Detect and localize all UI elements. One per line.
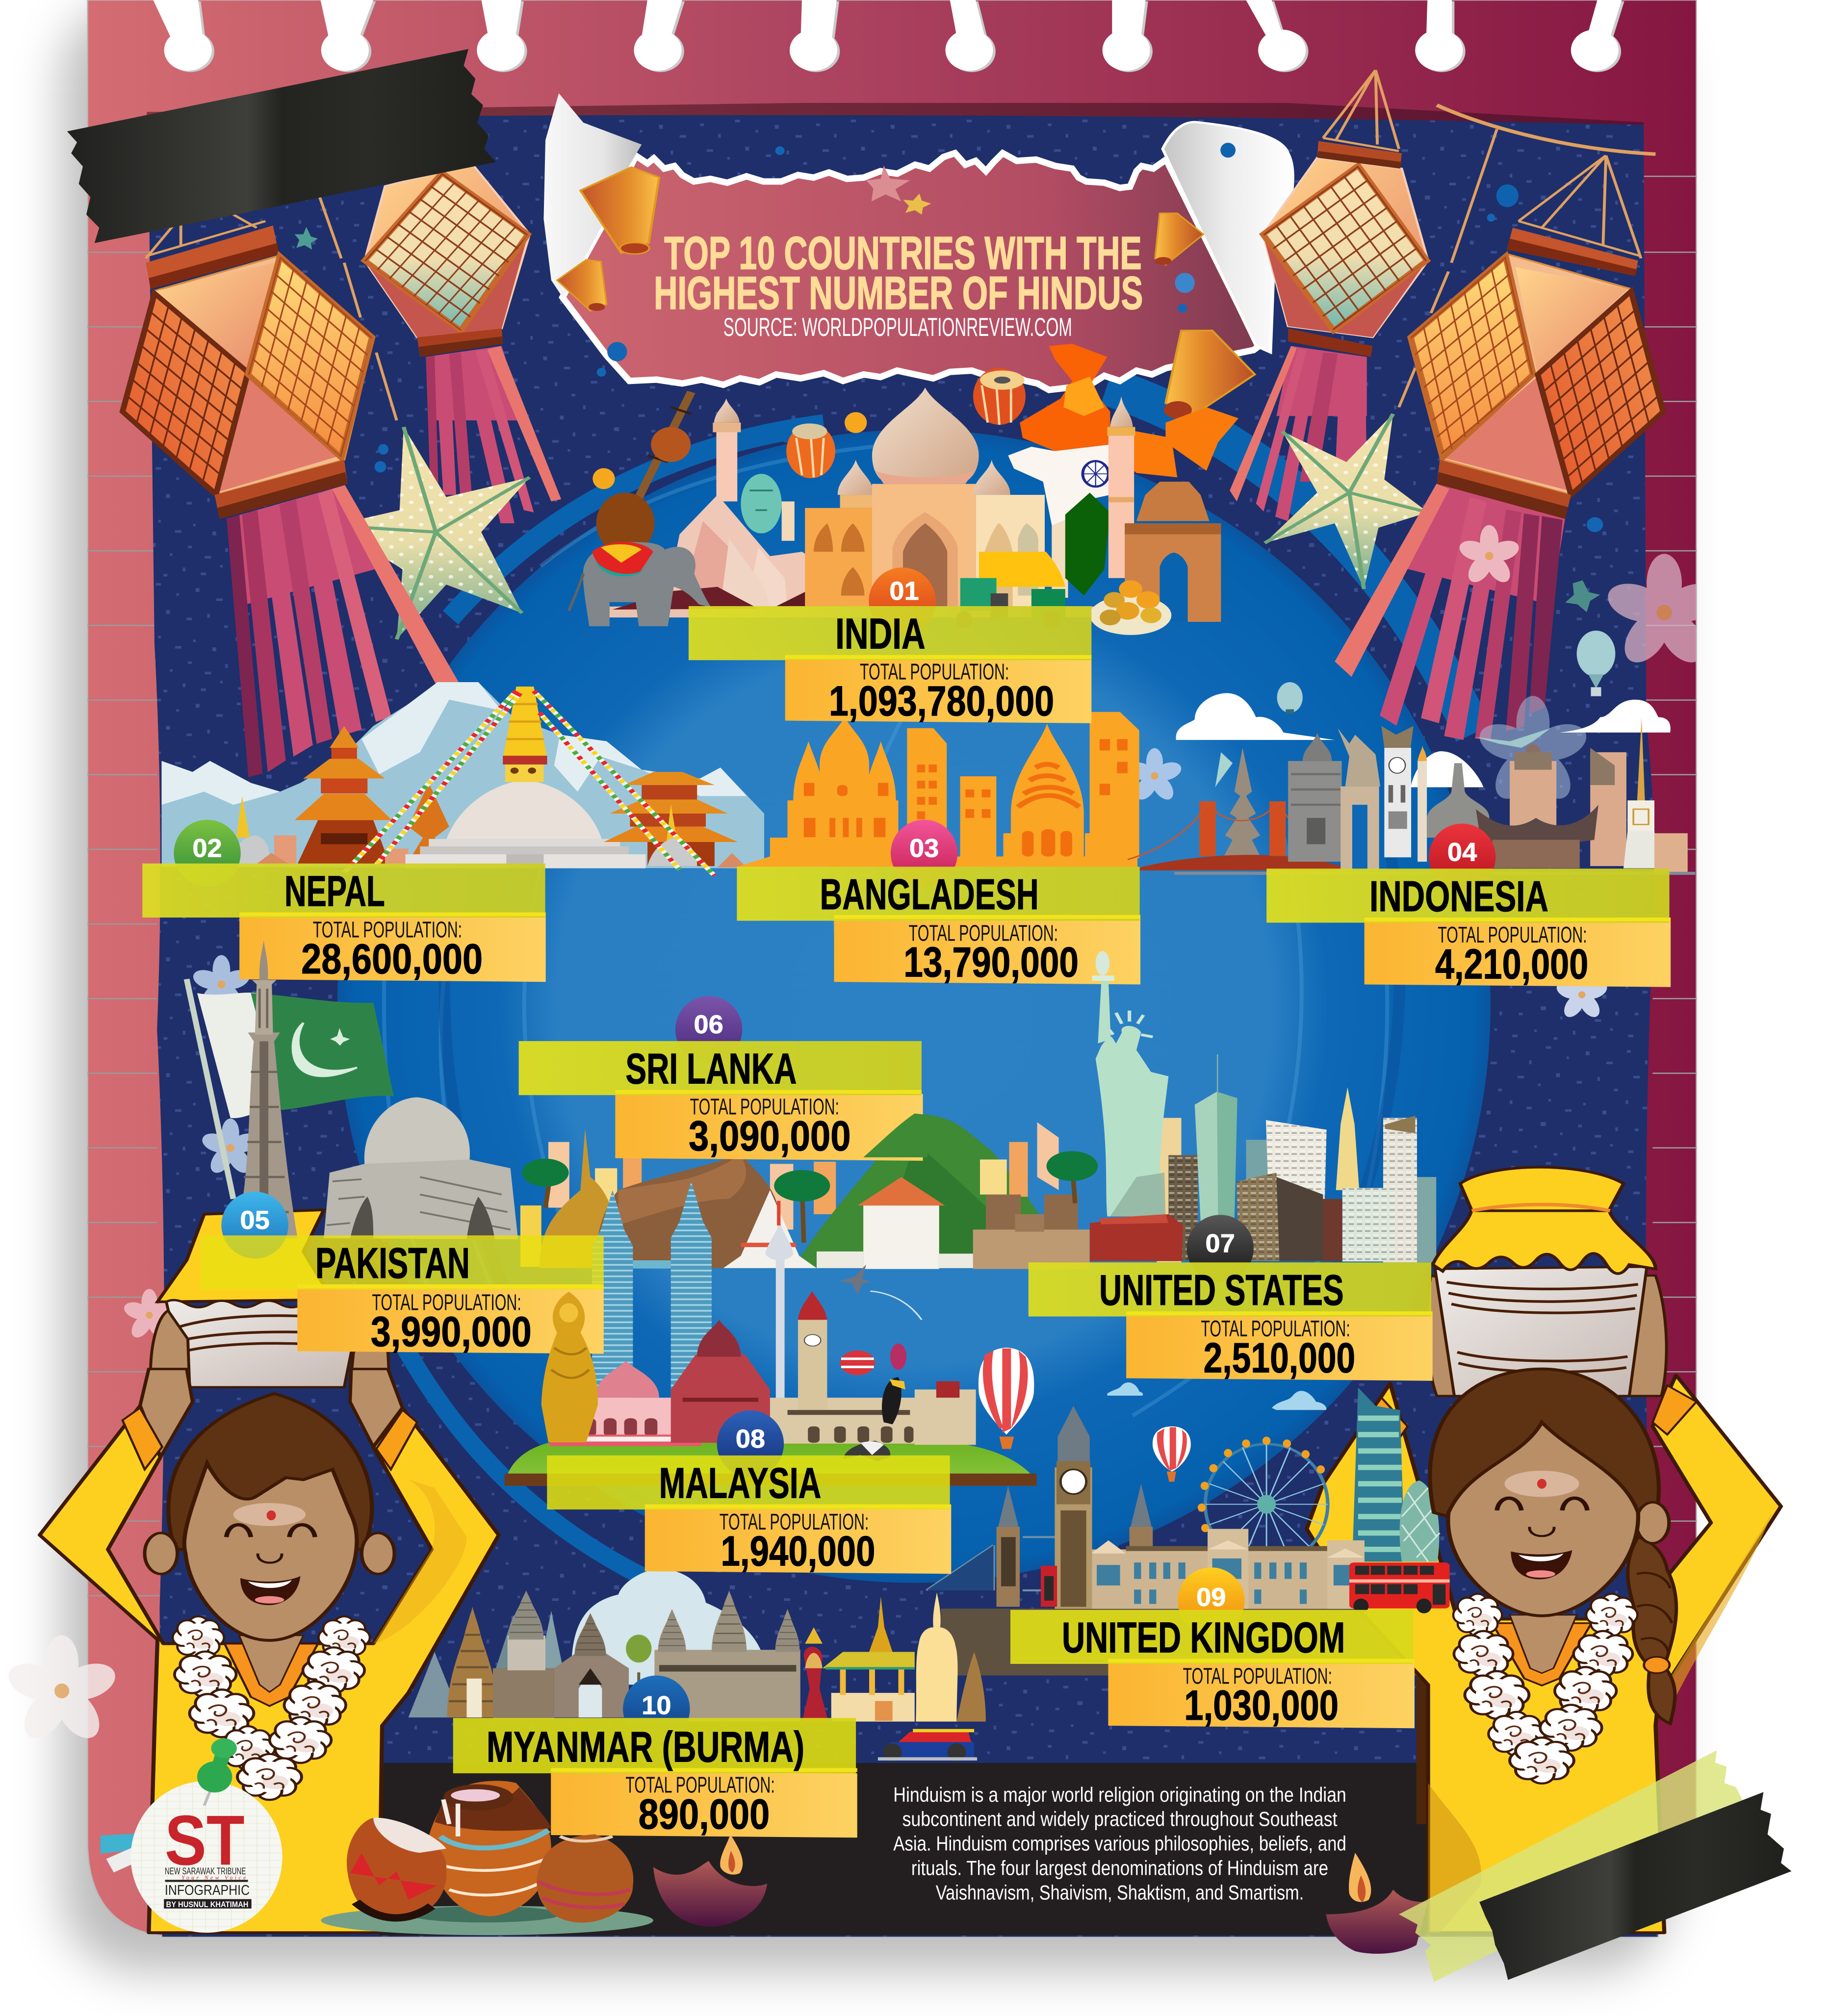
title sky lanterns right — [1155, 213, 1255, 419]
country label 06 Sri Lanka: 06 — [694, 1010, 723, 1039]
country label 08 Malaysia: 08 — [736, 1425, 765, 1454]
Hinduism description text: Hinduism is a major world religion originating on the Indian — [893, 1783, 1346, 1806]
left small lantern tassels and star — [320, 197, 561, 639]
Hinduism description text: subcontinent and widely practiced throughout Southeast — [902, 1808, 1338, 1831]
country label 09 United Kingdom: UNITED KINGDOM — [1062, 1613, 1345, 1661]
scene: Malaysia landmarks — [505, 1182, 1036, 1486]
title sky lanterns left — [557, 167, 659, 311]
golden statue over Pakistan label — [541, 1292, 598, 1442]
dark page edge strip — [147, 103, 1644, 142]
gold star and right dots — [903, 184, 1603, 612]
girl: head, braid and garland — [1430, 1369, 1676, 1784]
scene: hot air balloons and clouds — [979, 1348, 1326, 1482]
scene: Nepal landmarks — [161, 682, 764, 876]
right big lantern tassels — [1335, 484, 1565, 740]
binder holes — [153, 0, 1624, 72]
country label 02 Nepal — [142, 820, 546, 983]
scene: UK landmarks — [927, 1387, 1450, 1613]
country label 04 Indonesia: 04 — [1447, 838, 1477, 867]
diya lamp left — [653, 1835, 767, 1927]
Hinduism description text: rituals. The four largest denominations of Hinduism are — [911, 1856, 1328, 1879]
country label 09 United Kingdom — [1010, 1567, 1415, 1729]
country label 08 Malaysia: 1,940,000 — [721, 1528, 875, 1575]
country label 04 Indonesia — [1266, 823, 1671, 988]
right small lantern tassels, star and strings — [1230, 70, 1497, 589]
Hinduism description text: Asia. Hinduism comprises various philosophies, beliefs, and — [893, 1832, 1346, 1855]
title peel right roll — [1162, 122, 1293, 353]
country label 10 Myanmar: 890,000 — [639, 1791, 770, 1838]
boy character — [40, 1210, 499, 1933]
country label 05 Pakistan: 05 — [240, 1206, 270, 1235]
country label 05 Pakistan: 3,990,000 — [371, 1308, 532, 1355]
Hinduism description text: Vaishnavism, Shaivism, Shaktism, and Smartism. — [936, 1881, 1304, 1904]
logo badge with pin: ST — [165, 1800, 245, 1880]
diya lamp right — [1326, 1853, 1428, 1954]
country label 07 United States: TOTAL POPULATION: — [1201, 1316, 1350, 1341]
country label 02 Nepal: TOTAL POPULATION: — [313, 917, 462, 943]
scene: India landmarks — [569, 387, 1108, 626]
scene: Pakistan flag and mausoleum — [187, 979, 518, 1239]
country label 09 United Kingdom: 09 — [1196, 1583, 1226, 1612]
Hinduism description text — [893, 1783, 1346, 1904]
country label 03 Bangladesh: 03 — [909, 834, 939, 863]
scene: Indonesia landmarks and clouds — [1128, 682, 1695, 875]
scene: Myanmar temples — [409, 1569, 986, 1761]
country label 08 Malaysia: TOTAL POPULATION: — [720, 1509, 869, 1534]
country label 03 Bangladesh: 13,790,000 — [903, 939, 1079, 986]
logo badge with pin — [101, 1738, 283, 1933]
country label 08 Malaysia: MALAYSIA — [659, 1459, 821, 1507]
country label 01 India: 1,093,780,000 — [829, 678, 1054, 725]
logo badge with pin: Your New Voice — [181, 1874, 246, 1881]
country label 07 United States: 2,510,000 — [1204, 1335, 1355, 1382]
flowers — [4, 525, 1726, 1746]
navy background panel — [148, 115, 1658, 1937]
title text: HIGHEST NUMBER OF HINDUS — [654, 267, 1143, 319]
title text: TOP 10 COUNTRIES WITH THE — [664, 227, 1142, 279]
black tape top left — [67, 49, 496, 243]
clay pots on plate — [321, 1781, 653, 1935]
country label 09 United Kingdom: TOTAL POPULATION: — [1183, 1663, 1332, 1689]
country label 10 Myanmar: TOTAL POPULATION: — [625, 1772, 775, 1797]
blue swirl circle — [337, 386, 1491, 1589]
left big lantern tassels — [227, 485, 461, 777]
scene: United States skyline — [1090, 1011, 1436, 1262]
country label 06 Sri Lanka: 3,090,000 — [689, 1113, 851, 1160]
scene: India map, gate, rickshaw and sweets — [956, 344, 1238, 635]
country label 06 Sri Lanka: TOTAL POPULATION: — [690, 1094, 839, 1120]
scene: Sri Lanka landmarks — [520, 1114, 1098, 1269]
country label 10 Myanmar: MYANMAR (BURMA) — [487, 1722, 804, 1771]
title peel left — [543, 93, 642, 298]
black tape bottom right — [1479, 1792, 1791, 1980]
country label 02 Nepal: 28,600,000 — [301, 936, 483, 983]
country label 04 Indonesia: 4,210,000 — [1435, 941, 1588, 988]
small decorative stars and dots — [295, 146, 910, 473]
country label 10 Myanmar: 10 — [642, 1691, 671, 1720]
country label 09 United Kingdom: 1,030,000 — [1184, 1682, 1339, 1729]
right big lantern body and branch — [1411, 105, 1663, 519]
girl: sleeves and dress — [1307, 1375, 1781, 1933]
country label 03 Bangladesh: BANGLADESH — [820, 870, 1039, 919]
country label 01 India: INDIA — [835, 610, 926, 658]
right small lantern body — [1263, 141, 1428, 357]
country label 03 Bangladesh: TOTAL POPULATION: — [909, 920, 1058, 945]
scene: India drum and balls — [592, 412, 867, 489]
girl: pot and hands — [1427, 1167, 1667, 1396]
scene: Minar-e-Pakistan lower tower — [236, 1032, 298, 1238]
country label 01 India: 01 — [889, 577, 919, 606]
country label 05 Pakistan — [201, 1192, 604, 1355]
hot air balloons upper right — [1577, 631, 1615, 696]
Minar-e-Pakistan top over Nepal label — [252, 941, 277, 1035]
scene: Bangladesh skyline — [736, 712, 1139, 867]
title text: SOURCE: WORLDPOPULATIONREVIEW.COM — [723, 313, 1072, 342]
country label 07 United States: UNITED STATES — [1099, 1266, 1344, 1314]
left small lantern body — [364, 164, 530, 357]
country label 04 Indonesia: INDONESIA — [1369, 872, 1548, 920]
country label 06 Sri Lanka — [519, 996, 923, 1161]
country label 01 India — [689, 567, 1091, 725]
logo badge with pin: BY HUSNUL KHATIMAH — [166, 1900, 249, 1909]
country label 10 Myanmar — [453, 1676, 857, 1838]
bottom black text panel — [380, 1763, 1426, 1936]
scene: UK band — [941, 1608, 1466, 1676]
country label 03 Bangladesh — [737, 820, 1140, 986]
Statue of Liberty torch over label — [1092, 951, 1114, 1044]
title text — [654, 227, 1143, 342]
scene: Sri Lanka green hill over label — [863, 1114, 927, 1157]
country label 07 United States: 07 — [1206, 1229, 1235, 1258]
country label 05 Pakistan: TOTAL POPULATION: — [372, 1289, 521, 1315]
country label 02 Nepal: NEPAL — [284, 867, 385, 915]
logo badge with pin: NEW SARAWAK TRIBUNE — [165, 1866, 246, 1877]
country label 02 Nepal: 02 — [192, 834, 222, 863]
country label 07 United States — [1029, 1215, 1433, 1382]
logo badge with pin: INFOGRAPHIC — [165, 1883, 250, 1898]
lime transparent tape — [1399, 1750, 1743, 1982]
title torn banner — [563, 153, 1259, 390]
country label 08 Malaysia — [547, 1410, 951, 1575]
country label 05 Pakistan: PAKISTAN — [315, 1239, 470, 1287]
country label 06 Sri Lanka: SRI LANKA — [625, 1045, 797, 1093]
country label 04 Indonesia: TOTAL POPULATION: — [1438, 922, 1587, 947]
left big lantern body — [123, 215, 373, 519]
country label 01 India: TOTAL POPULATION: — [860, 659, 1009, 685]
